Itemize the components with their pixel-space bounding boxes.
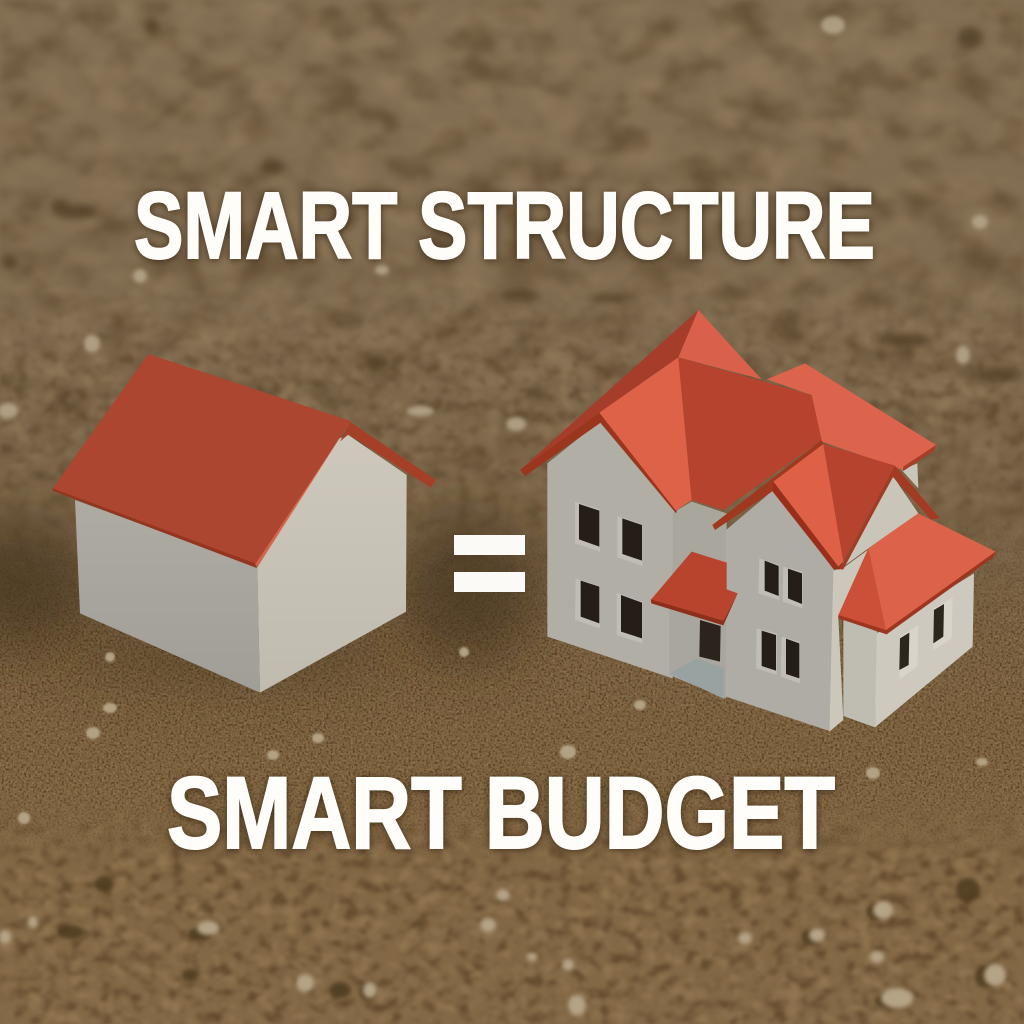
porch roof edge — [651, 593, 738, 625]
far gable roof edge — [340, 422, 436, 488]
left wall — [75, 500, 260, 693]
extension side wall — [875, 573, 974, 727]
front gable ridge — [712, 440, 823, 530]
porch step — [670, 658, 724, 699]
back upper gable wall — [843, 477, 918, 567]
extension roof edge — [838, 552, 996, 634]
porch door — [699, 620, 721, 662]
extension roof left facet — [838, 548, 886, 631]
subtitle: SMART BUDGET: SMART BUDGET — [167, 756, 835, 870]
extension roof main facet — [868, 513, 996, 631]
right rear roof edge — [903, 445, 936, 471]
back roof light slope — [678, 310, 762, 379]
main gable left rake — [520, 413, 678, 513]
detailed multi-gable house — [520, 310, 996, 732]
left wing wall — [547, 422, 676, 678]
porch roof — [651, 552, 738, 621]
front gable light facet — [773, 444, 843, 567]
main gable light facet — [599, 357, 692, 511]
roof side highlight — [255, 421, 351, 567]
porch lower wall — [669, 607, 726, 698]
small simple house — [53, 354, 436, 693]
back roof dark slope — [520, 310, 698, 470]
back wall corner — [902, 463, 918, 488]
recessed centre wall — [669, 502, 727, 667]
right rear roof — [767, 363, 936, 470]
right wing wall — [726, 490, 834, 731]
extension front wall — [843, 618, 877, 727]
front gable lower rake — [773, 482, 843, 569]
roof front edge — [53, 488, 257, 568]
equals sign — [454, 535, 525, 592]
right wall — [257, 435, 407, 693]
windows — [575, 502, 953, 683]
front gable dark facet — [823, 444, 895, 562]
main roof — [53, 354, 351, 565]
corner strip — [829, 548, 870, 732]
main gable dark facet — [678, 357, 822, 510]
front gable right rake — [840, 466, 940, 569]
